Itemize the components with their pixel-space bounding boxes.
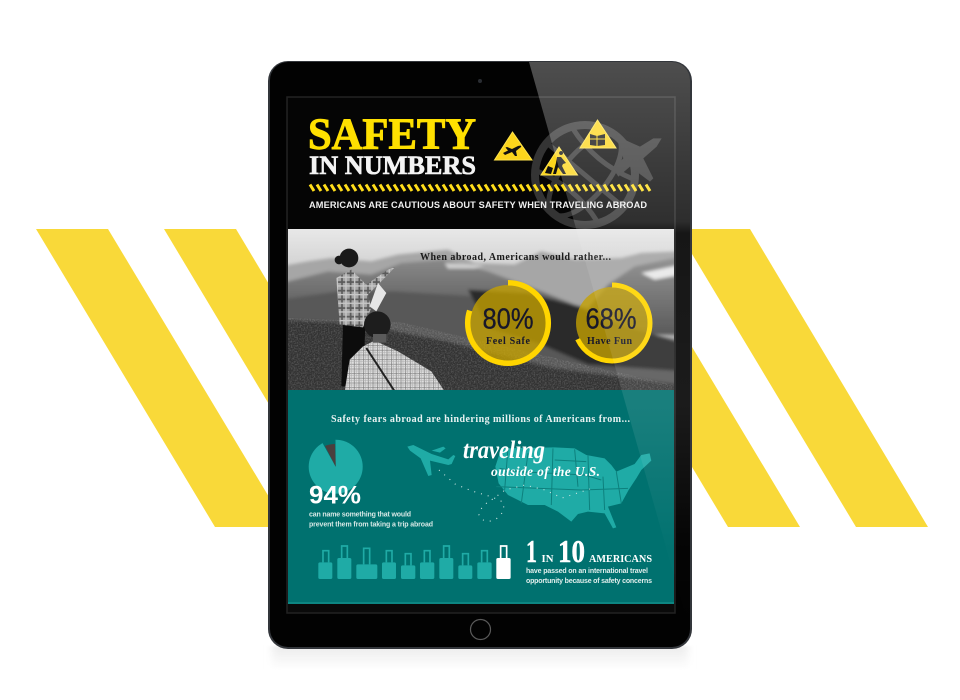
panel: header: [308, 118, 662, 229]
teal heading: Safety fears abroad are hindering millions of Americans from...: [331, 414, 630, 425]
tablet body: [268, 61, 692, 649]
stat circle: 68% have fun: [574, 285, 650, 361]
traveling script heading: traveling: [463, 437, 545, 464]
stat: 94%: [309, 482, 433, 528]
stat: 94%: prevent them from taking a trip abroad: [309, 522, 433, 528]
stat circle: 68% have fun: Have Fun: [587, 336, 632, 347]
traveling script heading: [463, 437, 600, 479]
traveling script heading: outside of the U.S.: [491, 464, 600, 479]
icon: airplane: [407, 445, 455, 476]
luggage row: [318, 546, 511, 579]
title: IN NUMBERS: [309, 151, 476, 180]
stat: 1 in 10 Americans: AMERICANS: [589, 553, 652, 565]
icon: map warning triangle: [580, 120, 616, 148]
title: SAFETY: [308, 110, 476, 158]
icon: walking traveler warning triangle: [541, 147, 578, 175]
stat: 1 in 10 Americans: have passed on an international travel: [526, 568, 648, 575]
map: United States: [495, 447, 651, 528]
subtitle: AMERICANS ARE CAUTIOUS ABOUT SAFETY WHEN TRAVELING ABROAD: [309, 200, 647, 210]
stat: 1 in 10 Americans: 10: [558, 533, 585, 569]
stat: 1 in 10 Americans: opportunity because of safety concerns: [526, 578, 652, 585]
icon: globe and plane watermark: [531, 121, 662, 229]
glass reflection: [529, 62, 690, 510]
tablet floor reflection: [272, 646, 688, 670]
dotted flight path: [439, 470, 590, 521]
hazard stripe: [310, 184, 650, 191]
home button: [470, 620, 490, 640]
icon: plane warning triangle: [494, 132, 532, 160]
pie chart 94%: [309, 439, 363, 494]
stat circle: 80% feel safe: [468, 283, 548, 363]
photo heading: When abroad, Americans would rather...: [420, 252, 612, 263]
stat circle: 68% have fun: 68%: [586, 304, 636, 336]
white suitcase: [496, 546, 511, 579]
panel: mountain photo: [281, 229, 681, 400]
camera: [478, 79, 482, 83]
man figure: [345, 311, 445, 391]
panel: teal statistics: [288, 390, 674, 604]
woman figure: [335, 249, 395, 386]
stat: 1 in 10 Americans: IN: [542, 553, 554, 565]
stat: 1 in 10 Americans: [526, 533, 652, 585]
stat: 94%: 94%: [309, 482, 361, 510]
stat: 1 in 10 Americans: 1: [526, 533, 537, 569]
title: [308, 110, 476, 180]
stat circle: 80% feel safe: Feel Safe: [486, 336, 531, 347]
stat circle: 80% feel safe: 80%: [482, 304, 534, 336]
stat: 94%: can name something that would: [309, 512, 411, 518]
yellow diagonal stripes background: [36, 229, 928, 527]
